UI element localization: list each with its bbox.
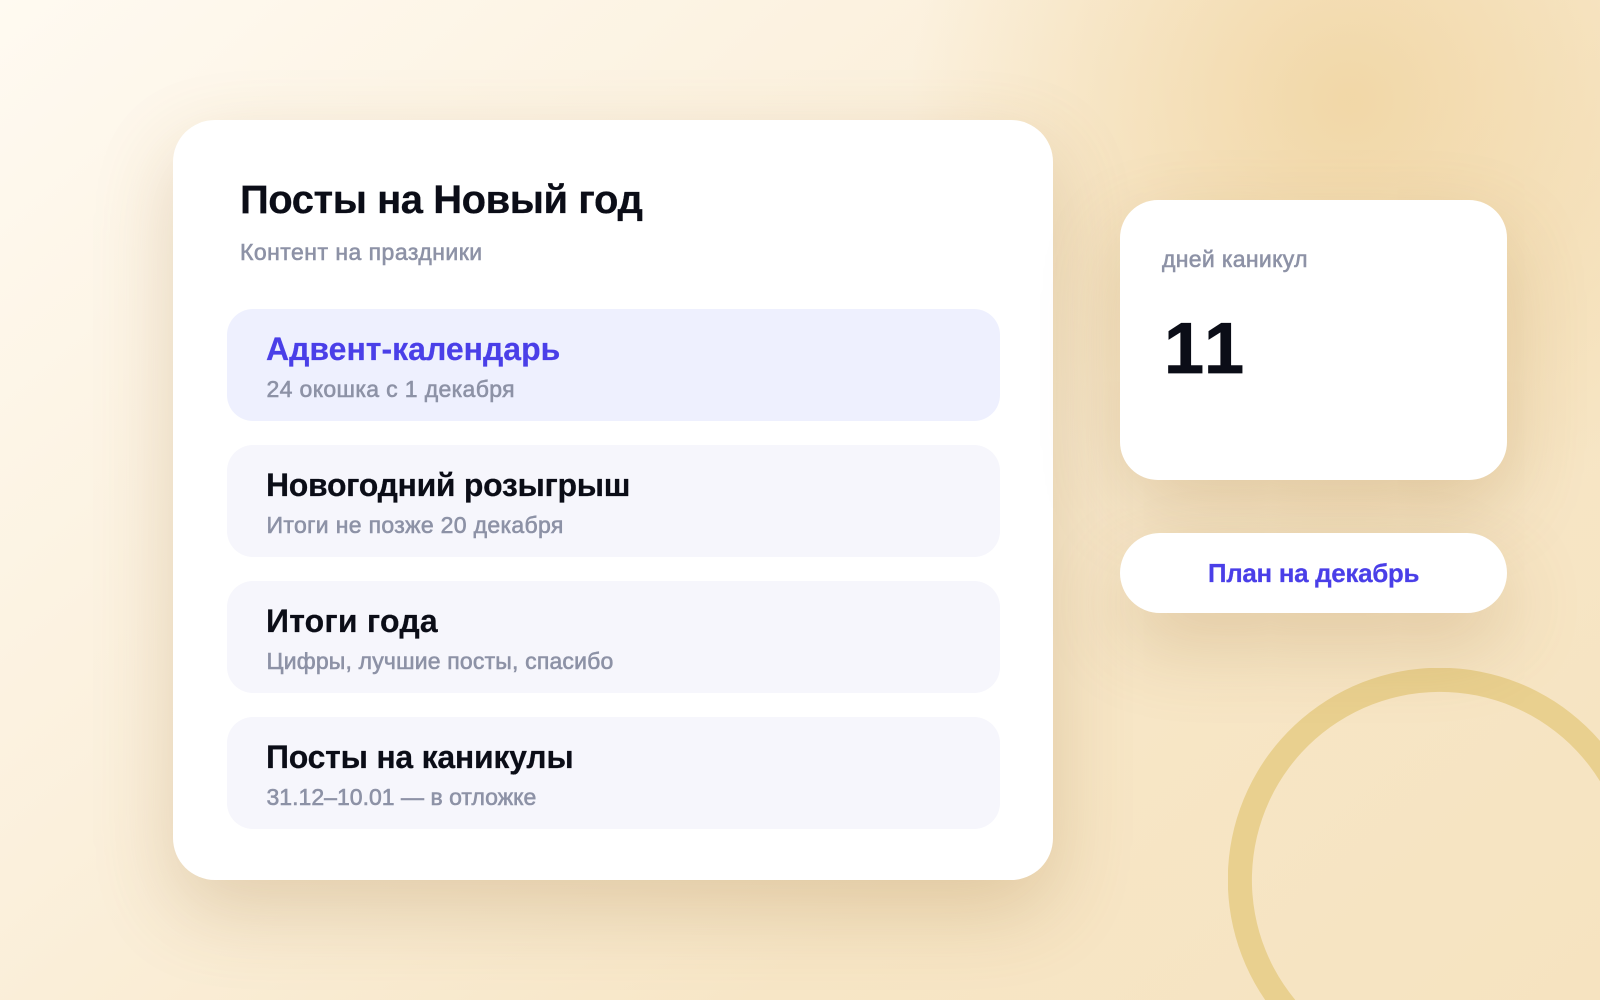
panel: holiday posts list xyxy=(173,120,1053,880)
list item: year results: Цифры, лучшие посты, спасибо xyxy=(266,648,613,674)
list item: holiday posts: 31.12–10.01 — в отложке xyxy=(266,784,536,810)
panel: vacation days stat xyxy=(1120,200,1507,480)
list item: holiday posts xyxy=(227,717,1000,829)
list item: advent calendar (active): 24 окошка с 1 декабря xyxy=(266,376,515,402)
list item: advent calendar (active): Адвент-календарь xyxy=(266,331,560,367)
list item: year results xyxy=(227,581,1000,693)
subtitle: Контент на праздники xyxy=(240,239,483,265)
list item: new year giveaway: Итоги не позже 20 декабря xyxy=(266,512,564,538)
button: december plan: План на декабрь xyxy=(1208,558,1419,588)
list item: new year giveaway xyxy=(227,445,1000,557)
list item: advent calendar (active) xyxy=(227,309,1000,421)
stat value: 11 xyxy=(1164,309,1244,389)
decorative ring xyxy=(1228,668,1600,1000)
list item: holiday posts: Посты на каникулы xyxy=(266,739,573,775)
stat label: дней каникул xyxy=(1162,246,1308,272)
list item: new year giveaway: Новогодний розыгрыш xyxy=(266,467,630,503)
title: Посты на Новый год xyxy=(240,178,642,222)
button: december plan xyxy=(1120,533,1507,613)
list item: year results: Итоги года xyxy=(266,603,438,639)
